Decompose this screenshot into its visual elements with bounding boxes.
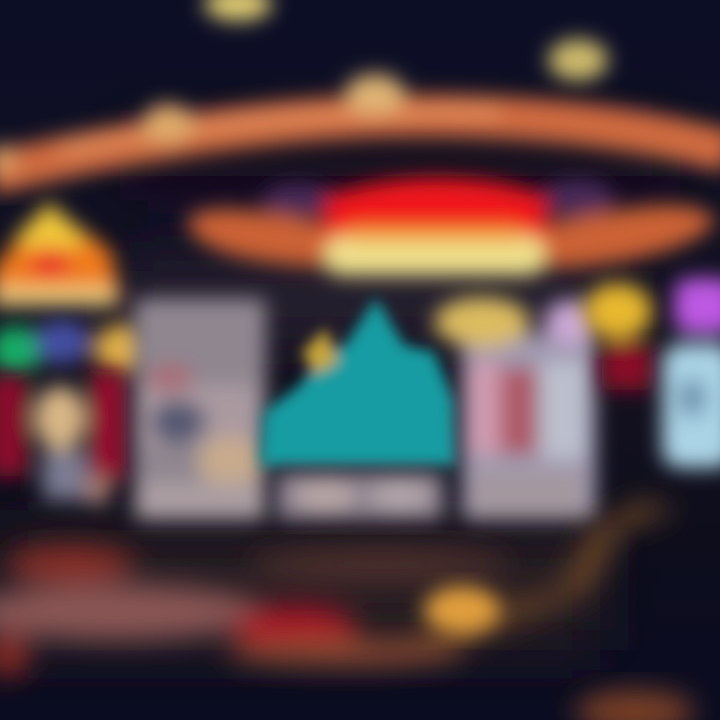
grey slot panel: [134, 298, 266, 520]
ceiling lights: [204, 0, 608, 81]
yellow lamp and red column: [584, 283, 652, 390]
central canopy: [186, 178, 716, 276]
base under teal panel: [276, 472, 444, 520]
left machine body: [0, 372, 126, 504]
right slot panel: [434, 297, 596, 520]
floor reflections: [0, 500, 680, 677]
teal centre panel: [260, 298, 456, 466]
far right machine: [662, 278, 720, 468]
golden floor highlight: [424, 586, 500, 634]
left machine lights: [0, 320, 150, 374]
background haze: [0, 130, 680, 650]
left slot machine topper: [0, 202, 122, 306]
upper orange arc: [0, 74, 720, 175]
lower right glow: [575, 690, 695, 720]
